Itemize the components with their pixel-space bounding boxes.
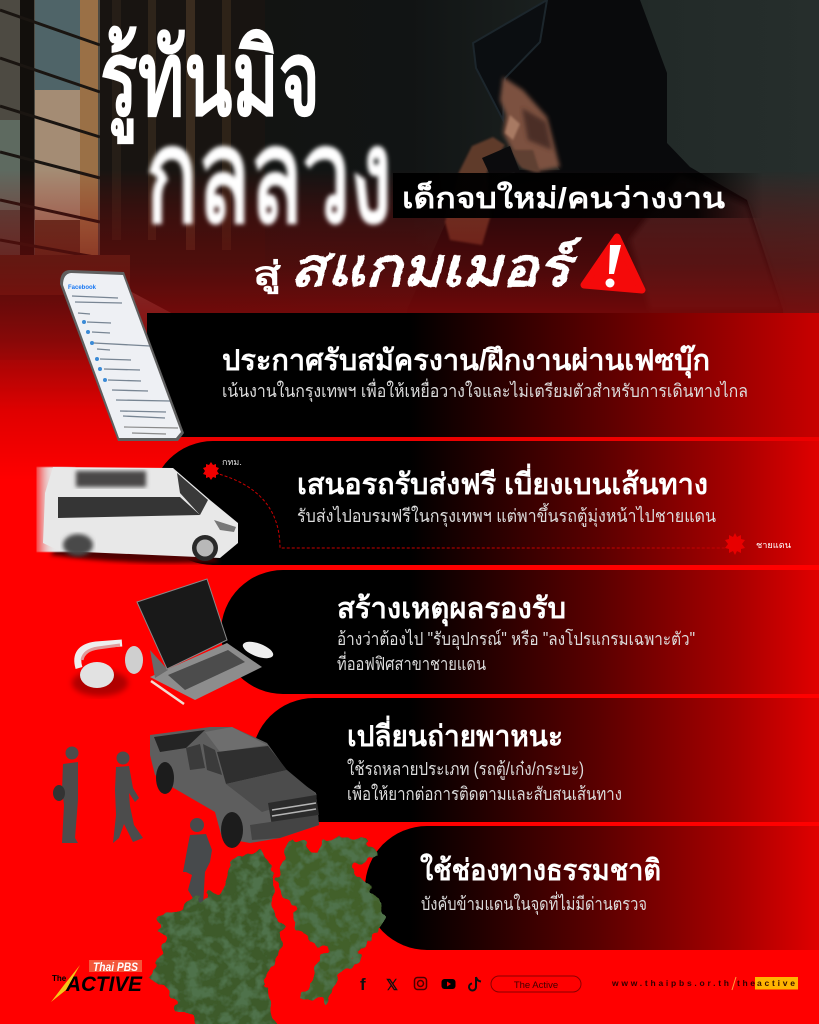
subtitle box: เด็กจบใหม่/คนว่างงาน <box>402 180 725 215</box>
main title line 2, blurred: กลลวง <box>146 103 392 250</box>
panel 4: change vehicles <box>53 698 819 848</box>
panel 5 description: บังคับข้ามแดนในจุดที่ไม่มีด่านตรวจ <box>421 891 647 915</box>
red fade over photo <box>0 170 819 480</box>
photo: hooded man in dark room <box>0 0 819 400</box>
route: Bangkok to border: ชายแดน <box>756 540 791 550</box>
panel 3 title: สร้างเหตุผลรองรับ <box>337 593 566 626</box>
panel 2: free van pickup <box>40 441 819 565</box>
phone mockup <box>60 270 184 441</box>
panel 2 title: เสนอรถรับส่งฟรี เบี่ยงเบนเส้นทาง <box>297 463 708 501</box>
route: Bangkok to border: กทม. <box>222 457 242 467</box>
icon: instagram <box>414 978 426 990</box>
panel 3 description: อ้างว่าต้องไป "รับอุปกรณ์" หรือ "ลงโปรแกรมเฉพาะตัว" <box>337 628 695 650</box>
panel 4 title: เปลี่ยนถ่ายพาหนะ <box>347 715 563 753</box>
panel 1 description: เน้นงานในกรุงเทพฯ เพื่อให้เหยื่อวางใจและไม่เตรียมตัวสำหรับการเดินทางไกล <box>222 378 748 402</box>
panel 4 description: ใช้รถหลายประเภท (รถตู้/เก๋ง/กระบะ) <box>347 758 584 780</box>
icon: youtube <box>442 979 456 989</box>
icon: X: 𝕏 <box>386 977 398 994</box>
icon: warning triangle <box>584 237 642 290</box>
panel 4 description <box>347 758 622 804</box>
main title line 1: รู้ทันมิจ <box>100 21 320 144</box>
logo: Thai PBS The Active: ACTIVE <box>65 973 143 996</box>
white van <box>40 467 238 563</box>
grey pickup truck <box>150 727 319 848</box>
hood and body <box>400 0 790 400</box>
panel 3 description <box>337 628 695 674</box>
tablet with keyboard <box>137 579 275 704</box>
window with blinds <box>0 0 265 300</box>
panel 1 title: ประกาศรับสมัครงาน/ฝึกงานผ่านเฟซบุ๊ก <box>222 344 710 378</box>
forest clusters <box>152 837 385 1024</box>
website url: the <box>737 978 755 988</box>
social icons <box>360 975 481 994</box>
panel 3 description: ที่ออฟฟิศสาขาชายแดน <box>337 651 486 674</box>
pill: The Active <box>491 976 581 992</box>
logo: Thai PBS The Active: The <box>52 974 67 983</box>
icon: facebook: f <box>360 975 366 994</box>
panel 2 description: รับส่งไปอบรมฟรีในกรุงเทพฯ แต่พาขึ้นรถตู้มุ่งหน้าไปชายแดน <box>297 503 716 527</box>
main title line 3: สแกมเมอร์ <box>290 237 583 298</box>
walking person 1 <box>53 746 78 843</box>
pill: The Active: The Active <box>514 980 558 991</box>
phone mockup: Facebook <box>68 285 97 291</box>
main title line 3: สู่ <box>253 255 282 295</box>
website url: active <box>757 978 795 988</box>
walking person 3 <box>183 818 212 906</box>
headphones <box>72 643 143 696</box>
panel 5 title: ใช้ช่องทางธรรมชาติ <box>420 853 661 887</box>
route: Bangkok to border <box>203 457 791 555</box>
open laptop lid <box>112 290 175 400</box>
panel 4 description: เพื่อให้ยากต่อการติดตามและสับสนเส้นทาง <box>347 781 622 804</box>
website url: www.thaipbs.or.th <box>611 978 729 988</box>
walking person 2 <box>113 752 143 843</box>
logo: Thai PBS The Active <box>51 960 143 1002</box>
logo: Thai PBS The Active: Thai PBS <box>93 960 138 974</box>
icon: tiktok <box>469 977 481 990</box>
panel 1: Facebook job ads <box>60 270 819 441</box>
panel 5: natural routes <box>365 826 819 950</box>
subtitle box <box>393 173 763 218</box>
website url <box>611 977 798 990</box>
panel 3: excuse <box>72 570 819 704</box>
